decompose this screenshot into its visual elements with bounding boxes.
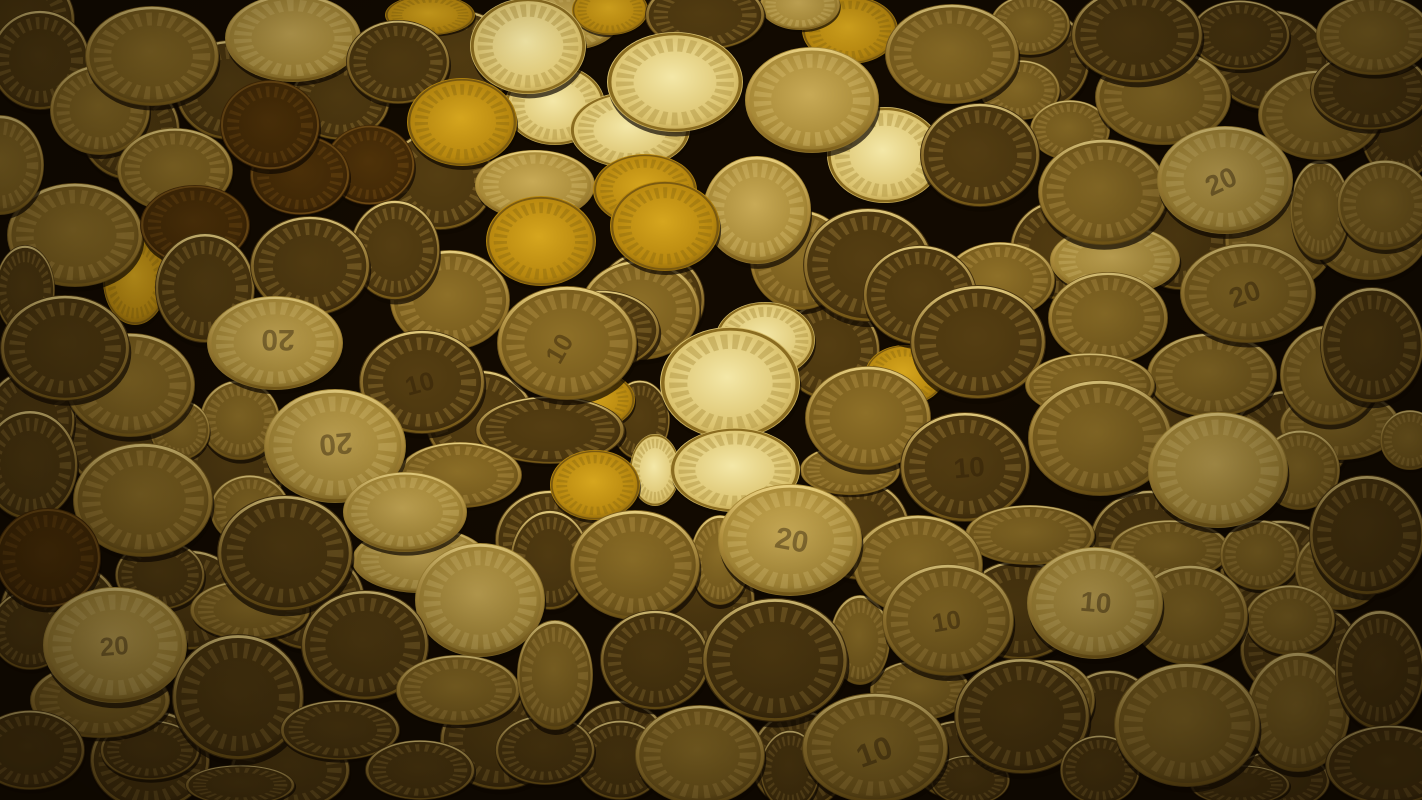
coin denominations: 20 <box>318 426 354 461</box>
coin denominations: 10 <box>539 328 579 369</box>
coin denominations: 10 <box>851 729 897 775</box>
front layer of coins <box>0 285 1422 800</box>
middle layer of coins <box>0 0 1422 430</box>
coin denominations: 20 <box>99 630 130 662</box>
coin denominations <box>99 161 1265 775</box>
coin denominations: 10 <box>952 451 986 484</box>
coin denominations: 20 <box>1225 274 1265 314</box>
coin denominations: 10 <box>930 604 963 638</box>
coin denominations: 20 <box>772 521 811 560</box>
coin denominations: 20 <box>261 323 295 356</box>
coin denominations: 10 <box>1079 586 1113 619</box>
coin denominations: 20 <box>1200 161 1242 202</box>
coin denominations: 10 <box>402 365 438 402</box>
